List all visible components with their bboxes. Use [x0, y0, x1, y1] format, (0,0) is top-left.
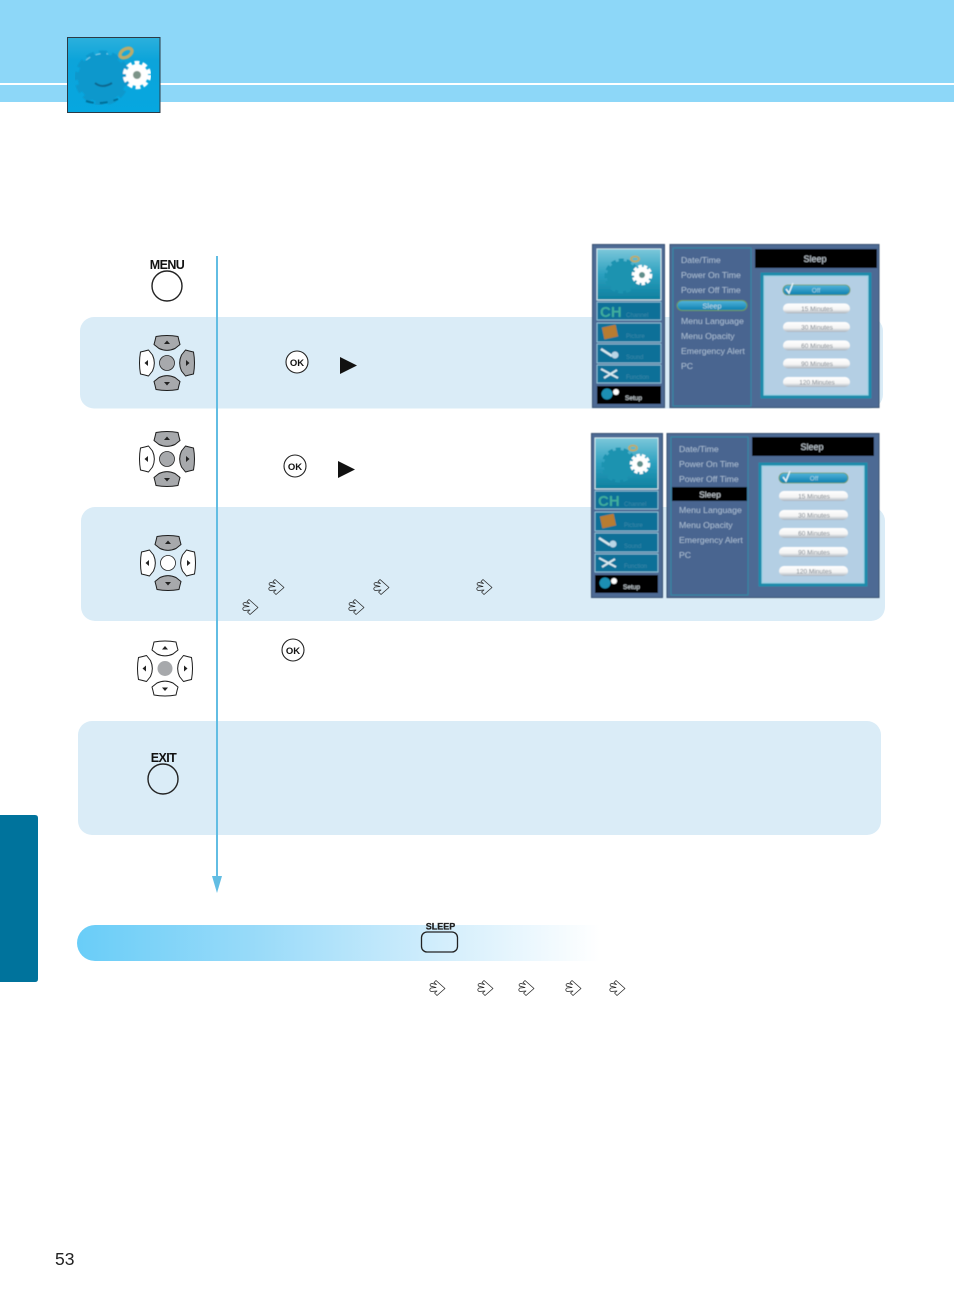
screen right: sleep options: 90 Minutes	[801, 361, 834, 368]
screen right: sleep options: Date/Time	[679, 444, 719, 454]
screen left: main menu: Channel	[626, 313, 648, 319]
icon: direction pad step 4	[140, 536, 196, 590]
screen right: sleep options: Menu Opacity	[681, 331, 735, 341]
icon: right triangle step 2	[340, 357, 357, 374]
screen right: sleep options: PC	[681, 361, 693, 371]
screen right: sleep options: PC	[679, 550, 691, 560]
panel: step 4 background	[81, 507, 885, 621]
screen right: sleep options: Sleep	[702, 302, 722, 310]
icon: right triangle step 3	[338, 461, 355, 478]
icon: direction pad step 2	[140, 336, 194, 390]
screen right: sleep options: Off	[812, 288, 820, 294]
button: EXIT: EXIT	[151, 751, 177, 765]
screen right: sleep options: Power Off Time	[681, 285, 741, 295]
screen right: sleep options	[667, 434, 879, 598]
screen right: sleep options: 30 Minutes	[801, 324, 834, 332]
icon: OK button step 2: OK	[290, 358, 304, 369]
screen right: sleep options: 15 Minutes	[801, 306, 834, 313]
screen right: sleep options: 30 Minutes	[798, 512, 831, 520]
panel: step 2 background	[80, 317, 883, 408]
screen left: main menu: Function	[626, 375, 649, 381]
panel: step 6 background	[78, 721, 881, 835]
screen right: sleep options: Menu Language	[679, 505, 742, 515]
screen right: sleep options: Date/Time	[681, 255, 721, 265]
tip bar	[77, 925, 600, 961]
icon: OK button step 2	[286, 351, 308, 373]
screen: sleep menu selected	[592, 434, 879, 598]
screen right: sleep options: Sleep	[803, 254, 827, 264]
screen: sleep menu highlighted	[592, 244, 879, 408]
icon: sleep timer sequence arrows	[430, 980, 625, 996]
screen right: sleep options: 90 Minutes	[798, 550, 831, 556]
screen right: sleep options: 15 Minutes	[798, 494, 831, 500]
icon: OK button step 5: OK	[286, 646, 300, 657]
button: MENU: MENU	[150, 258, 185, 272]
screen right: sleep options: 60 Minutes	[801, 343, 834, 350]
header band	[0, 0, 954, 102]
screen right: sleep options: 120 Minutes	[796, 568, 832, 576]
button: SLEEP	[422, 922, 458, 952]
screen right: sleep options	[670, 244, 879, 408]
screen left: main menu: Setup	[623, 584, 640, 591]
screen left: main menu: Setup	[625, 395, 642, 402]
screen right: sleep options: Menu Opacity	[679, 520, 733, 530]
screen right: sleep options: Power On Time	[681, 270, 741, 280]
icon: setup gears	[68, 38, 160, 112]
screen right: sleep options: Sleep	[699, 490, 721, 500]
flow arrow	[212, 256, 222, 893]
icon: direction pad step 3	[140, 432, 194, 486]
screen left: main menu: CH	[600, 304, 622, 321]
button: EXIT	[148, 751, 178, 794]
screen left: main menu: Picture	[626, 334, 645, 340]
screen left: main menu: Channel	[624, 502, 646, 508]
side tab	[0, 815, 38, 982]
screen right: sleep options: Sleep	[800, 442, 824, 452]
screen right: sleep options: Emergency Alert	[679, 535, 743, 545]
screen right: sleep options: 120 Minutes	[799, 380, 835, 386]
screen right: sleep options: Power On Time	[679, 459, 739, 469]
button: MENU	[150, 258, 185, 301]
icon: OK button step 3: OK	[288, 462, 302, 473]
screen left: main menu	[592, 434, 662, 598]
screen left: main menu: Function	[624, 564, 647, 570]
icon: direction pad step 5	[138, 641, 192, 696]
screen right: sleep options: Emergency Alert	[681, 346, 745, 356]
icon: OK button step 3	[284, 455, 306, 477]
screen left: main menu: CH	[598, 493, 620, 510]
screen right: sleep options: Power Off Time	[679, 474, 739, 484]
screen left: main menu: Picture	[624, 523, 643, 529]
page number: 53	[55, 1249, 74, 1269]
icon: sequence arrows step 4	[243, 580, 492, 614]
screen left: main menu	[592, 244, 664, 408]
screen right: sleep options: Off	[810, 476, 818, 482]
screen right: sleep options: Menu Language	[681, 316, 744, 326]
screen right: sleep options: 60 Minutes	[798, 530, 831, 538]
icon: OK button step 5	[282, 639, 304, 661]
screen left: main menu: Sound	[624, 544, 641, 550]
screen left: main menu: Sound	[626, 355, 643, 361]
button: SLEEP: SLEEP	[426, 922, 455, 932]
